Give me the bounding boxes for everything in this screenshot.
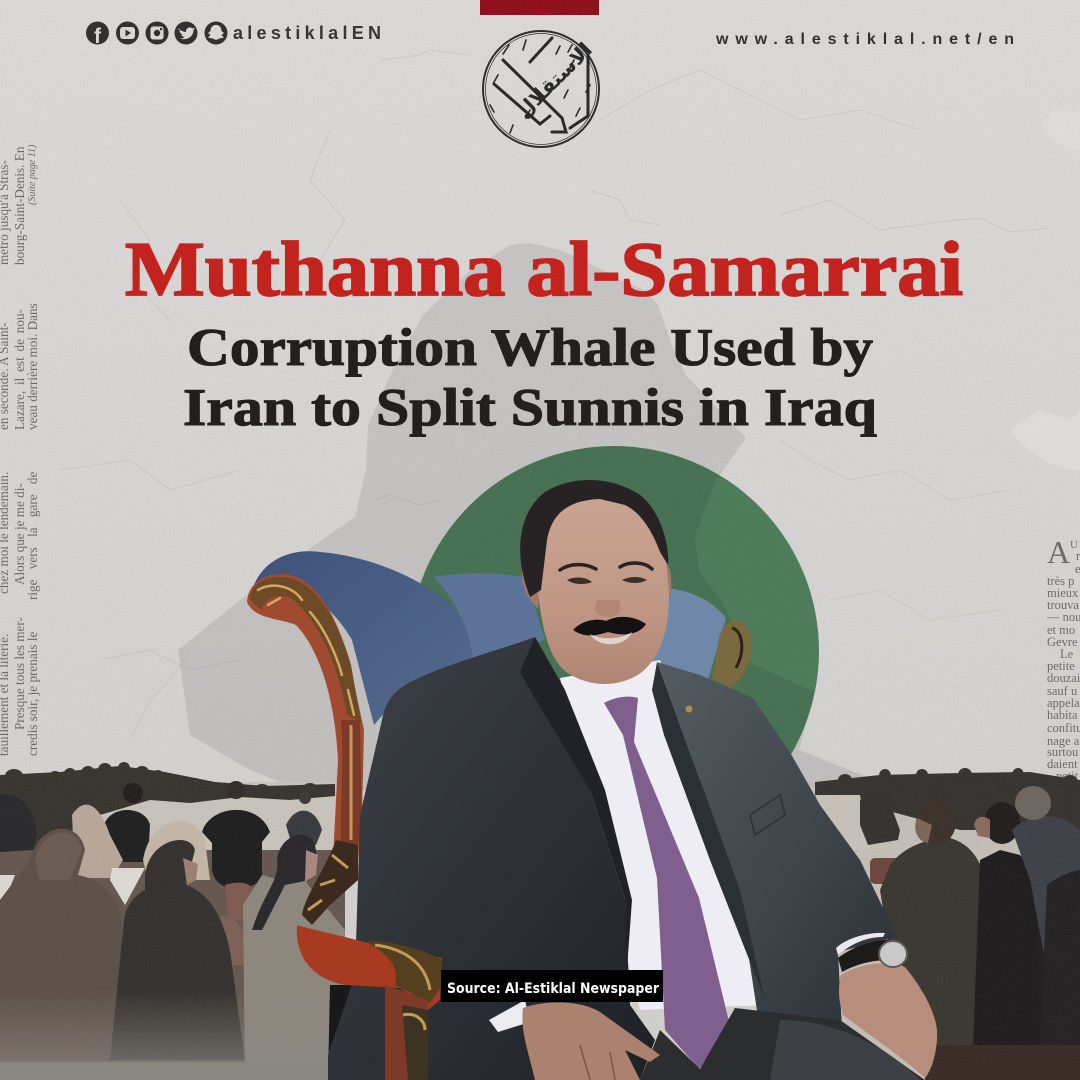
left column text, bottom block: credis soir, je prenais le xyxy=(25,632,40,756)
face xyxy=(536,497,669,684)
social handle: alestiklalEN xyxy=(233,23,381,43)
subtitle: Corruption Whale Used by xyxy=(187,319,873,377)
website url: www.alestiklal.net/en xyxy=(715,31,1014,48)
logo: calligraphic seal: الاستقلال xyxy=(512,38,597,123)
suit: right side xyxy=(657,662,897,1030)
right cuff xyxy=(836,933,885,955)
left column text, third block: veau derrière moi. Dans xyxy=(25,303,40,430)
source label xyxy=(441,970,663,1002)
left column text, bottom block xyxy=(0,617,40,756)
left column text, second block: rige vers la gare de xyxy=(25,472,40,600)
crowd: left side xyxy=(0,762,345,1080)
crowd: right side xyxy=(805,768,1080,1080)
head xyxy=(520,480,671,684)
chair back: right wing xyxy=(650,588,726,680)
wristwatch xyxy=(838,940,907,972)
seated woman left xyxy=(0,829,122,1060)
left lapel xyxy=(520,637,632,968)
chair arm and leg xyxy=(297,925,442,1080)
wood frame: left upright xyxy=(247,574,364,860)
map of Iraq silhouette xyxy=(178,243,880,790)
newspaper column: right edge: petite xyxy=(1047,659,1075,673)
chair leg xyxy=(385,985,428,1080)
newspaper column: right edge: Gevre xyxy=(1047,635,1078,649)
man: seated figure xyxy=(328,480,937,1080)
newspaper column: right edge: A xyxy=(1047,534,1070,570)
eyes xyxy=(567,577,647,584)
newspaper column: right edge: Le xyxy=(1060,647,1074,661)
icon: youtube xyxy=(116,22,139,44)
left hand xyxy=(522,1002,660,1080)
red top bar xyxy=(480,0,599,15)
suit: left side xyxy=(328,637,655,1080)
green circle xyxy=(409,446,819,856)
left column text, top block: (Suite page 11) xyxy=(27,144,38,205)
ears xyxy=(522,560,542,608)
chair back: centre xyxy=(434,573,545,665)
left column text, top block: bourg-Saint-Denis. En xyxy=(12,146,27,265)
red seats xyxy=(225,883,254,920)
left column text, third block: Lazare, il est de nou- xyxy=(12,309,27,430)
newspaper column: right edge: U xyxy=(1070,539,1078,551)
newspaper column: rotated left edge xyxy=(0,144,40,756)
man in grey jacket xyxy=(1012,786,1080,960)
shirt cuff: left xyxy=(489,1000,530,1032)
newspaper column: right edge: et mo xyxy=(1047,623,1075,637)
nose xyxy=(595,600,621,617)
newspaper column: right edge: trouva xyxy=(1047,598,1079,612)
newspaper column: right edge: daient xyxy=(1047,757,1078,771)
breast pocket xyxy=(750,795,785,835)
newspaper column: right edge: très p xyxy=(1047,574,1074,588)
mustache xyxy=(573,617,646,636)
left column text, top block xyxy=(0,144,38,265)
title: Muthanna al-Samarrai xyxy=(125,226,963,312)
left column text, bottom block: Presque tous les mer- xyxy=(12,617,27,730)
floor fade xyxy=(0,990,345,1080)
hair xyxy=(520,480,668,597)
back row heads xyxy=(0,762,335,850)
lapel pin xyxy=(686,706,692,712)
icon: snapchat xyxy=(204,22,228,44)
social media icons xyxy=(86,22,228,48)
subtitle xyxy=(183,319,877,437)
newspaper column: right edge: appela xyxy=(1047,696,1080,710)
icon: instagram xyxy=(146,22,168,44)
dark base under chair xyxy=(328,985,400,1080)
woman in black xyxy=(973,802,1040,1050)
chair back xyxy=(247,551,752,1080)
logo: calligraphic seal xyxy=(483,31,599,147)
newspaper column: right edge: habita xyxy=(1047,708,1078,722)
back row xyxy=(815,768,1080,830)
left column text, second block xyxy=(0,472,40,600)
chair ornament: right xyxy=(712,621,752,688)
source label: Source: Al-Estiklal Newspaper xyxy=(447,981,659,997)
icon: twitter xyxy=(174,22,198,44)
newspaper column: right edge: mieux xyxy=(1047,586,1079,600)
lower carving xyxy=(302,840,358,925)
left column text, third block xyxy=(0,303,40,430)
eyebrows xyxy=(560,563,652,570)
man in dark suit xyxy=(880,799,985,1050)
icon: facebook xyxy=(86,22,109,48)
icon: facebook: f xyxy=(94,25,102,48)
chair back: left wing xyxy=(252,551,473,725)
bottom band xyxy=(925,1045,1080,1080)
newspaper column: right edge: petit xyxy=(1056,769,1079,783)
right lapel xyxy=(652,662,765,1000)
newspaper column: right edge: surtou xyxy=(1047,745,1079,759)
newspaper column: right edge: sauf u xyxy=(1047,684,1078,698)
right hand xyxy=(839,963,937,1078)
shirt xyxy=(560,660,770,1010)
seated woman centre xyxy=(110,840,245,1060)
trousers xyxy=(640,1008,925,1080)
dark figure far right xyxy=(1040,870,1080,1045)
armrest xyxy=(297,925,442,1010)
newspaper column: right edge: douzai xyxy=(1047,671,1080,685)
seated woman right xyxy=(243,835,345,1080)
subtitle: Iran to Split Sunnis in Iraq xyxy=(183,379,877,437)
standing people xyxy=(0,781,322,905)
tie xyxy=(604,697,732,1069)
newspaper column: right edge xyxy=(1046,534,1080,783)
left column text, second block: Alors que je me di- xyxy=(12,483,27,585)
newspaper column: right edge: nage a xyxy=(1047,734,1080,748)
gilded carving xyxy=(250,577,361,722)
smile xyxy=(590,632,632,644)
